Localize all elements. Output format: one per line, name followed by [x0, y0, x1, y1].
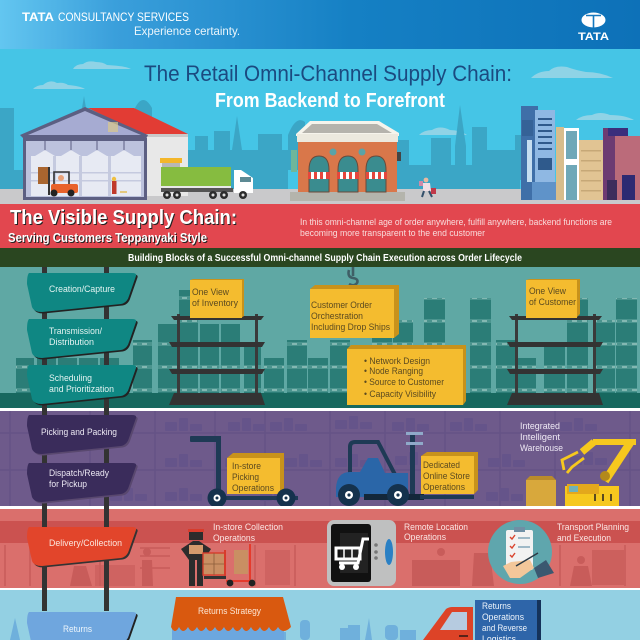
main title: The Retail Omni-Channel Supply Chain: [144, 61, 512, 86]
integrated intelligent warehouse label: Integrated [520, 421, 560, 432]
icon: safe with shopping cart [327, 520, 396, 586]
consultancy wordmark: CONSULTANCY SERVICES [58, 10, 189, 24]
sign: scheduling and prioritization [27, 365, 138, 406]
floor [0, 393, 640, 408]
hand truck with in-store picking box: Operations [232, 483, 274, 494]
box: customer order orchestration [310, 285, 399, 338]
box: one view of customer: One View [529, 286, 566, 297]
darker heading strip [0, 521, 640, 543]
box: customer order orchestration: Orchestration [311, 311, 363, 322]
sign: transmission/distribution: Transmission/ [49, 326, 102, 337]
sign: returns [27, 612, 138, 640]
box: one view of inventory: One View [192, 287, 229, 298]
white divider [0, 408, 640, 411]
city skyline [0, 96, 525, 198]
banner subheading shadow: Serving Customers Teppanyaki Style [9, 231, 208, 246]
truck: returns operations and reverse logistics: Operations [482, 612, 524, 623]
transport planning label: and Execution [557, 533, 611, 544]
in-store collection label: In-store Collection [213, 522, 283, 533]
truck: returns operations and reverse logistics: Returns [482, 601, 511, 612]
hero scene [0, 49, 640, 204]
panel: order creation and scheduling [0, 267, 640, 408]
subtitle: From Backend to Forefront [215, 90, 445, 112]
box: network design list: • Node Ranging [364, 366, 423, 377]
box: one view of inventory [190, 279, 244, 318]
blue forklift with dedicated online store box: Online Store [423, 471, 470, 482]
box: customer order orchestration: Including Drop Ships [311, 322, 390, 333]
remote location label: Operations [404, 532, 446, 543]
sign: creation/capture [27, 273, 138, 314]
shelf right [507, 314, 603, 405]
banner description: In this omni-channel age of order anywhere, fulfill anywhere, backend functions are [300, 217, 612, 228]
icon: clipboard in circle [488, 520, 554, 584]
banner description: becoming more transparent to the end customer [300, 228, 485, 239]
signpost [27, 267, 138, 640]
box: customer order orchestration: Customer Order [311, 300, 372, 311]
icon: Tata logo: TATA [578, 31, 609, 43]
panel: picking and dispatch [0, 411, 640, 508]
skyscrapers [521, 106, 640, 200]
skyline [10, 618, 416, 640]
tagline: Experience certainty. [134, 24, 240, 38]
worker [112, 177, 127, 194]
hand truck with in-store picking box: Picking [232, 472, 259, 483]
sign: delivery/collection: Delivery/Collection [49, 538, 122, 549]
awning: returns strategy [171, 597, 291, 640]
sign: transmission/distribution [27, 319, 138, 360]
remote location label: Remote Location [404, 522, 468, 533]
blue forklift with dedicated online store box [336, 432, 478, 506]
box: one view of customer [526, 279, 580, 318]
banner subheading: Serving Customers Teppanyaki Style [8, 230, 207, 245]
box: one view of inventory: of Inventory [192, 298, 238, 309]
sign: picking and packing: Picking and Packing [41, 427, 117, 438]
box: network design list: • Source to Customer [364, 377, 444, 388]
banner heading: The Visible Supply Chain: [10, 207, 237, 229]
in-store collection label: Operations [213, 533, 255, 544]
banner heading shadow: The Visible Supply Chain: [11, 208, 238, 230]
posts [42, 267, 109, 611]
panel: returns [0, 590, 640, 640]
blue forklift with dedicated online store box: Operations [423, 482, 465, 493]
forklift [38, 167, 78, 196]
icon: Tata logo [578, 12, 609, 43]
hand truck with in-store picking box: In-store [232, 461, 261, 472]
truck: returns operations and reverse logistics [423, 600, 541, 640]
box: network design list [347, 345, 466, 405]
sign: scheduling and prioritization: Scheduling [49, 373, 92, 384]
white divider [0, 506, 640, 509]
store silhouettes [5, 545, 625, 586]
sign: delivery/collection [27, 527, 138, 568]
box: network design list: • Capacity Visibility [364, 389, 436, 400]
sign: dispatch/ready for pickup: for Pickup [49, 479, 87, 490]
TCS wordmark: TATA [22, 10, 54, 24]
warehouse boxes background [16, 290, 637, 393]
icon: delivery man with trolley [181, 529, 255, 586]
sign: scheduling and prioritization: and Prioritization [49, 384, 114, 395]
red banner [0, 204, 640, 248]
truck: returns operations and reverse logistics: and Reverse [482, 623, 527, 634]
road [0, 189, 640, 204]
sign: transmission/distribution: Distribution [49, 337, 94, 348]
icon: robot arm [526, 442, 636, 506]
sign: creation/capture: Creation/Capture [49, 284, 115, 295]
box: network design list: • Network Design [364, 356, 430, 367]
sign: returns: Returns [63, 624, 92, 635]
box: one view of customer: of Customer [529, 297, 576, 308]
shelf left [169, 314, 265, 405]
truck [160, 158, 253, 199]
sign: picking and packing [27, 415, 138, 456]
icon: crane hook [348, 267, 358, 285]
store shelves background [0, 411, 640, 506]
header bar [0, 0, 640, 49]
awning: returns strategy: Returns Strategy [198, 606, 261, 617]
integrated intelligent warehouse label: Warehouse [520, 443, 563, 454]
blue forklift with dedicated online store box: Dedicated [423, 460, 460, 471]
shopper [419, 178, 436, 197]
transport planning label: Transport Planning [557, 522, 629, 533]
sign: dispatch/ready for pickup: Dispatch/Ready [49, 468, 109, 479]
store [290, 121, 405, 201]
panel: delivery and collection [0, 509, 640, 588]
warehouse [20, 107, 188, 200]
white divider [0, 588, 640, 590]
clouds [33, 61, 634, 135]
hand truck with in-store picking box [190, 436, 298, 508]
dark green heading bar [0, 248, 640, 267]
dark green heading bar: Building Blocks of a Successful Omni-channel Supply Chain Execution across Order Lifecycle [128, 252, 522, 264]
sign: dispatch/ready for pickup [27, 463, 138, 504]
integrated intelligent warehouse label: Intelligent [520, 432, 560, 443]
